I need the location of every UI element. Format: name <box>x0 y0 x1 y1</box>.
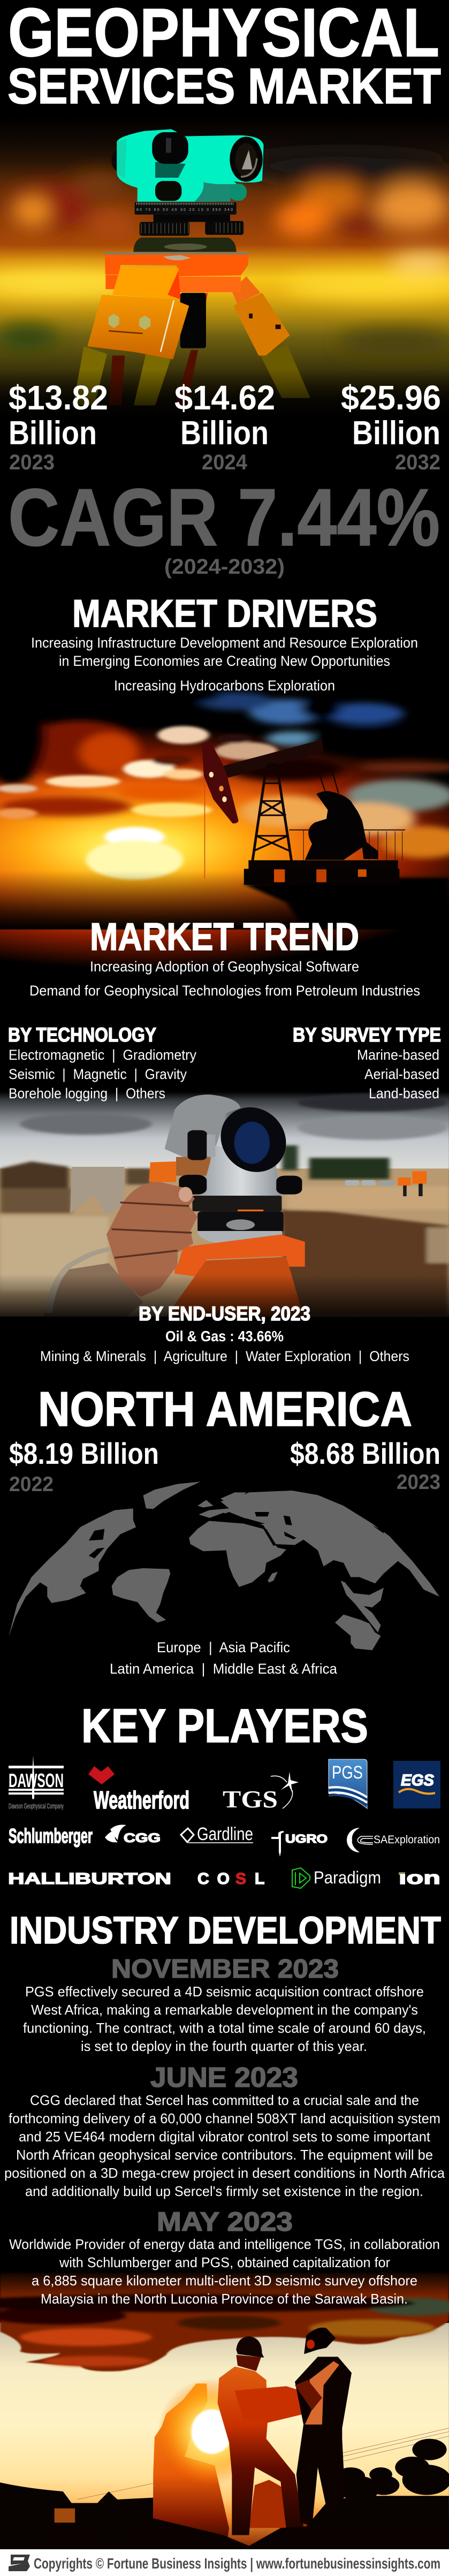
logo: PGS <box>329 1759 367 1808</box>
icon: pumpjack silhouette <box>202 740 405 885</box>
photo: surveying level on tripod <box>0 116 449 423</box>
panel: by survey type <box>293 1024 441 1101</box>
photo: workers silhouetted at sunset <box>0 2269 449 2550</box>
logo: SAExploration <box>347 1828 440 1852</box>
logo: EGS <box>393 1761 440 1808</box>
panel: by technology: Borehole logging | Others <box>9 1085 165 1101</box>
logo: TGS: TGS <box>223 1785 278 1813</box>
logo: CGG: CGG <box>124 1831 161 1845</box>
stat: 2032 market size <box>341 378 441 474</box>
logo: ION: ıon <box>399 1868 440 1888</box>
text: TGS development: a 6,885 square kilometer multi-client 3D seismic survey offshore <box>32 2273 417 2289</box>
icon: workers in background <box>345 1171 427 1196</box>
stat: CAGR: (2024-2032) <box>164 555 285 579</box>
text: TGS development <box>9 2236 440 2307</box>
icon: treeline silhouette <box>0 2439 449 2550</box>
logo: Paradigm <box>292 1868 381 1888</box>
icon: red cloud band <box>0 2273 449 2372</box>
icon: surveyor hand and sleeve <box>43 1182 197 1317</box>
logo: COSL: CO <box>197 1870 230 1888</box>
heading: november 2023: NOVEMBER 2023 <box>111 1955 339 1984</box>
logo: Fugro: UGRO <box>285 1832 328 1845</box>
icon: world globe map <box>9 1481 439 1650</box>
text: PGS development: PGS effectively secured a 4D seismic acquisition contract offshore <box>25 1984 424 2000</box>
heading: key players: KEY PLAYERS <box>81 1699 368 1752</box>
footer <box>0 2549 449 2576</box>
text: market trend list: Demand for Geophysical Technologies from Petroleum Industries <box>29 983 420 999</box>
icon: level instrument body <box>111 129 264 202</box>
icon: Fortune Business Insights logo <box>9 2555 30 2571</box>
logo: Gardline <box>181 1824 253 1844</box>
text: CGG development: and 25 VE464 modern digital vibrator control sets to some important <box>19 2129 431 2145</box>
panel: by technology: Electromagnetic | Gradiometry <box>9 1047 196 1063</box>
stat: North America 2022: $8.19 Billion <box>9 1437 159 1470</box>
text: other regions <box>110 1639 338 1677</box>
icon: tripod head plate and clamps <box>87 252 290 359</box>
icon: level dial and gears <box>133 202 243 255</box>
logo: Weatherford <box>88 1766 189 1814</box>
logo: COSL <box>197 1870 264 1888</box>
text: market drivers list <box>31 635 418 694</box>
logo: COSL: S <box>235 1870 246 1888</box>
photo: oil pumpjack at sunset <box>0 673 449 969</box>
icon: bright lit clouds <box>0 726 278 879</box>
logo: Dawson: Dawson Geophysical Company <box>9 1802 64 1810</box>
panel: by end-user: BY END-USER, 2023 <box>139 1303 310 1325</box>
stat: North America 2023 <box>290 1437 440 1494</box>
stat: 2024 market size: $14.62 <box>174 378 275 417</box>
logo: COSL: L <box>255 1870 264 1888</box>
logo: Weatherford: Weatherford <box>94 1786 189 1814</box>
title <box>7 0 441 114</box>
text: CGG development: and additionally build up Sercel's firmly set existence in the region. <box>25 2183 423 2199</box>
icon: level dial and gears: 80 70 60 50 40 30 20 10 0 350 340 <box>136 208 233 212</box>
icon: excavator silhouette <box>149 2383 229 2550</box>
icon: concrete block <box>70 1167 125 1215</box>
panel: by end-user: Oil & Gas : 43.66% <box>165 1328 284 1344</box>
text: other regions: Latin America | Middle East & Africa <box>110 1661 338 1677</box>
text: PGS development: functioning. The contract, with a total time scale of around 60 days, <box>23 2020 426 2036</box>
panel: by technology <box>8 1024 196 1101</box>
logo: Fugro <box>271 1831 328 1857</box>
heading: may 2023: MAY 2023 <box>157 2207 293 2237</box>
logo: Paradigm: Paradigm <box>314 1868 381 1887</box>
icon: surveyor head and hard hat <box>149 1095 240 1182</box>
logo: CGG <box>105 1825 161 1845</box>
text: PGS development: is set to deploy in the fourth quarter of this year. <box>81 2038 367 2054</box>
text: market trend list <box>29 959 420 999</box>
logo: EGS: EGS <box>401 1772 434 1789</box>
stat: 2023 market size: Billion <box>9 415 97 452</box>
stat: 2024 market size: Billion <box>180 415 269 452</box>
stat: North America 2023: 2023 <box>397 1471 440 1494</box>
text: CGG development: positioned on a 3D mega-crew project in desert conditions in North Africa <box>4 2165 445 2181</box>
logo: Gardline: Gardline <box>197 1824 253 1844</box>
icon: worker on left <box>218 2336 324 2535</box>
heading: market trend: MARKET TREND <box>90 916 359 959</box>
icon: sun glare <box>157 2378 267 2485</box>
text: CGG development: North African geophysical service contributors. The equipment will be <box>16 2147 433 2163</box>
icon: worker on right <box>295 2328 352 2526</box>
panel: by survey type: Marine-based <box>357 1047 439 1063</box>
stat: 2032 market size: 2032 <box>395 451 440 474</box>
panel: by technology: Seismic | Magnetic | Gravity <box>9 1066 187 1082</box>
stat: 2023 market size: $13.82 <box>9 378 108 417</box>
stat: 2023 market size: 2023 <box>9 451 55 474</box>
text: CGG development <box>4 2092 445 2199</box>
panel: by end-user <box>40 1303 409 1364</box>
heading: market drivers: MARKET DRIVERS <box>72 592 377 635</box>
icon: foreground ground <box>28 2517 449 2550</box>
logo: Schlumberger: Schlumberger <box>9 1825 93 1848</box>
logo: PGS: PGS <box>332 1762 363 1783</box>
stat: 2032 market size: $25.96 <box>341 378 441 417</box>
text: market drivers list: Increasing Hydrocarbons Exploration <box>114 678 335 694</box>
panel: by end-user: Mining & Minerals | Agriculture | Water Exploration | Others <box>40 1348 409 1364</box>
panel: by survey type: Land-based <box>369 1085 439 1101</box>
logo: SAExploration: SAExploration <box>374 1834 440 1846</box>
icon: power lines <box>77 2428 449 2499</box>
text: PGS development <box>23 1984 426 2054</box>
text: TGS development: Worldwide Provider of energy data and intelligence TGS, in collaboration <box>9 2236 440 2252</box>
text: market drivers list: in Emerging Economies are Creating New Opportunities <box>59 653 390 669</box>
text: market drivers list: Increasing Infrastructure Development and Resource Exploration <box>31 635 418 651</box>
stat: North America 2022 <box>9 1437 159 1496</box>
text: CGG development: CGG declared that Sercel has committed to a crucial sale and the <box>30 2092 419 2108</box>
text: TGS development: Malaysia in the North Luconia Province of the Sarawak Basin. <box>41 2291 408 2307</box>
icon: level instrument front <box>166 1105 305 1317</box>
photo: surveyor with level <box>0 1092 449 1325</box>
text: PGS development: West Africa, making a remarkable development in the company's <box>31 2002 418 2018</box>
text: other regions: Europe | Asia Pacific <box>157 1639 290 1655</box>
heading: june 2023: JUNE 2023 <box>150 2062 298 2093</box>
text: TGS development: with Schlumberger and PGS, obtained capitalization for <box>59 2254 390 2270</box>
panel: by survey type: Aerial-based <box>364 1066 439 1082</box>
stat: North America 2022: 2022 <box>9 1473 54 1496</box>
logo: Dawson <box>9 1756 64 1810</box>
icon: tripod legs <box>73 276 310 405</box>
panel: by technology: BY TECHNOLOGY <box>8 1024 156 1046</box>
logo: Dawson: DAWSON <box>9 1769 64 1791</box>
logo: ION <box>399 1868 440 1888</box>
text: market trend list: Increasing Adoption of Geophysical Software <box>90 959 359 975</box>
heading: north america: NORTH AMERICA <box>38 1382 412 1437</box>
stat: 2023 market size <box>9 378 108 474</box>
logo: TGS <box>223 1772 299 1813</box>
stat: 2024 market size <box>174 378 275 474</box>
stat: 2024 market size: 2024 <box>202 451 248 474</box>
logo: Halliburton: HALLIBURTON <box>8 1870 171 1888</box>
text: CGG development: forthcoming delivery of a 60,000 channel 508XT land acquisition system <box>9 2110 440 2126</box>
